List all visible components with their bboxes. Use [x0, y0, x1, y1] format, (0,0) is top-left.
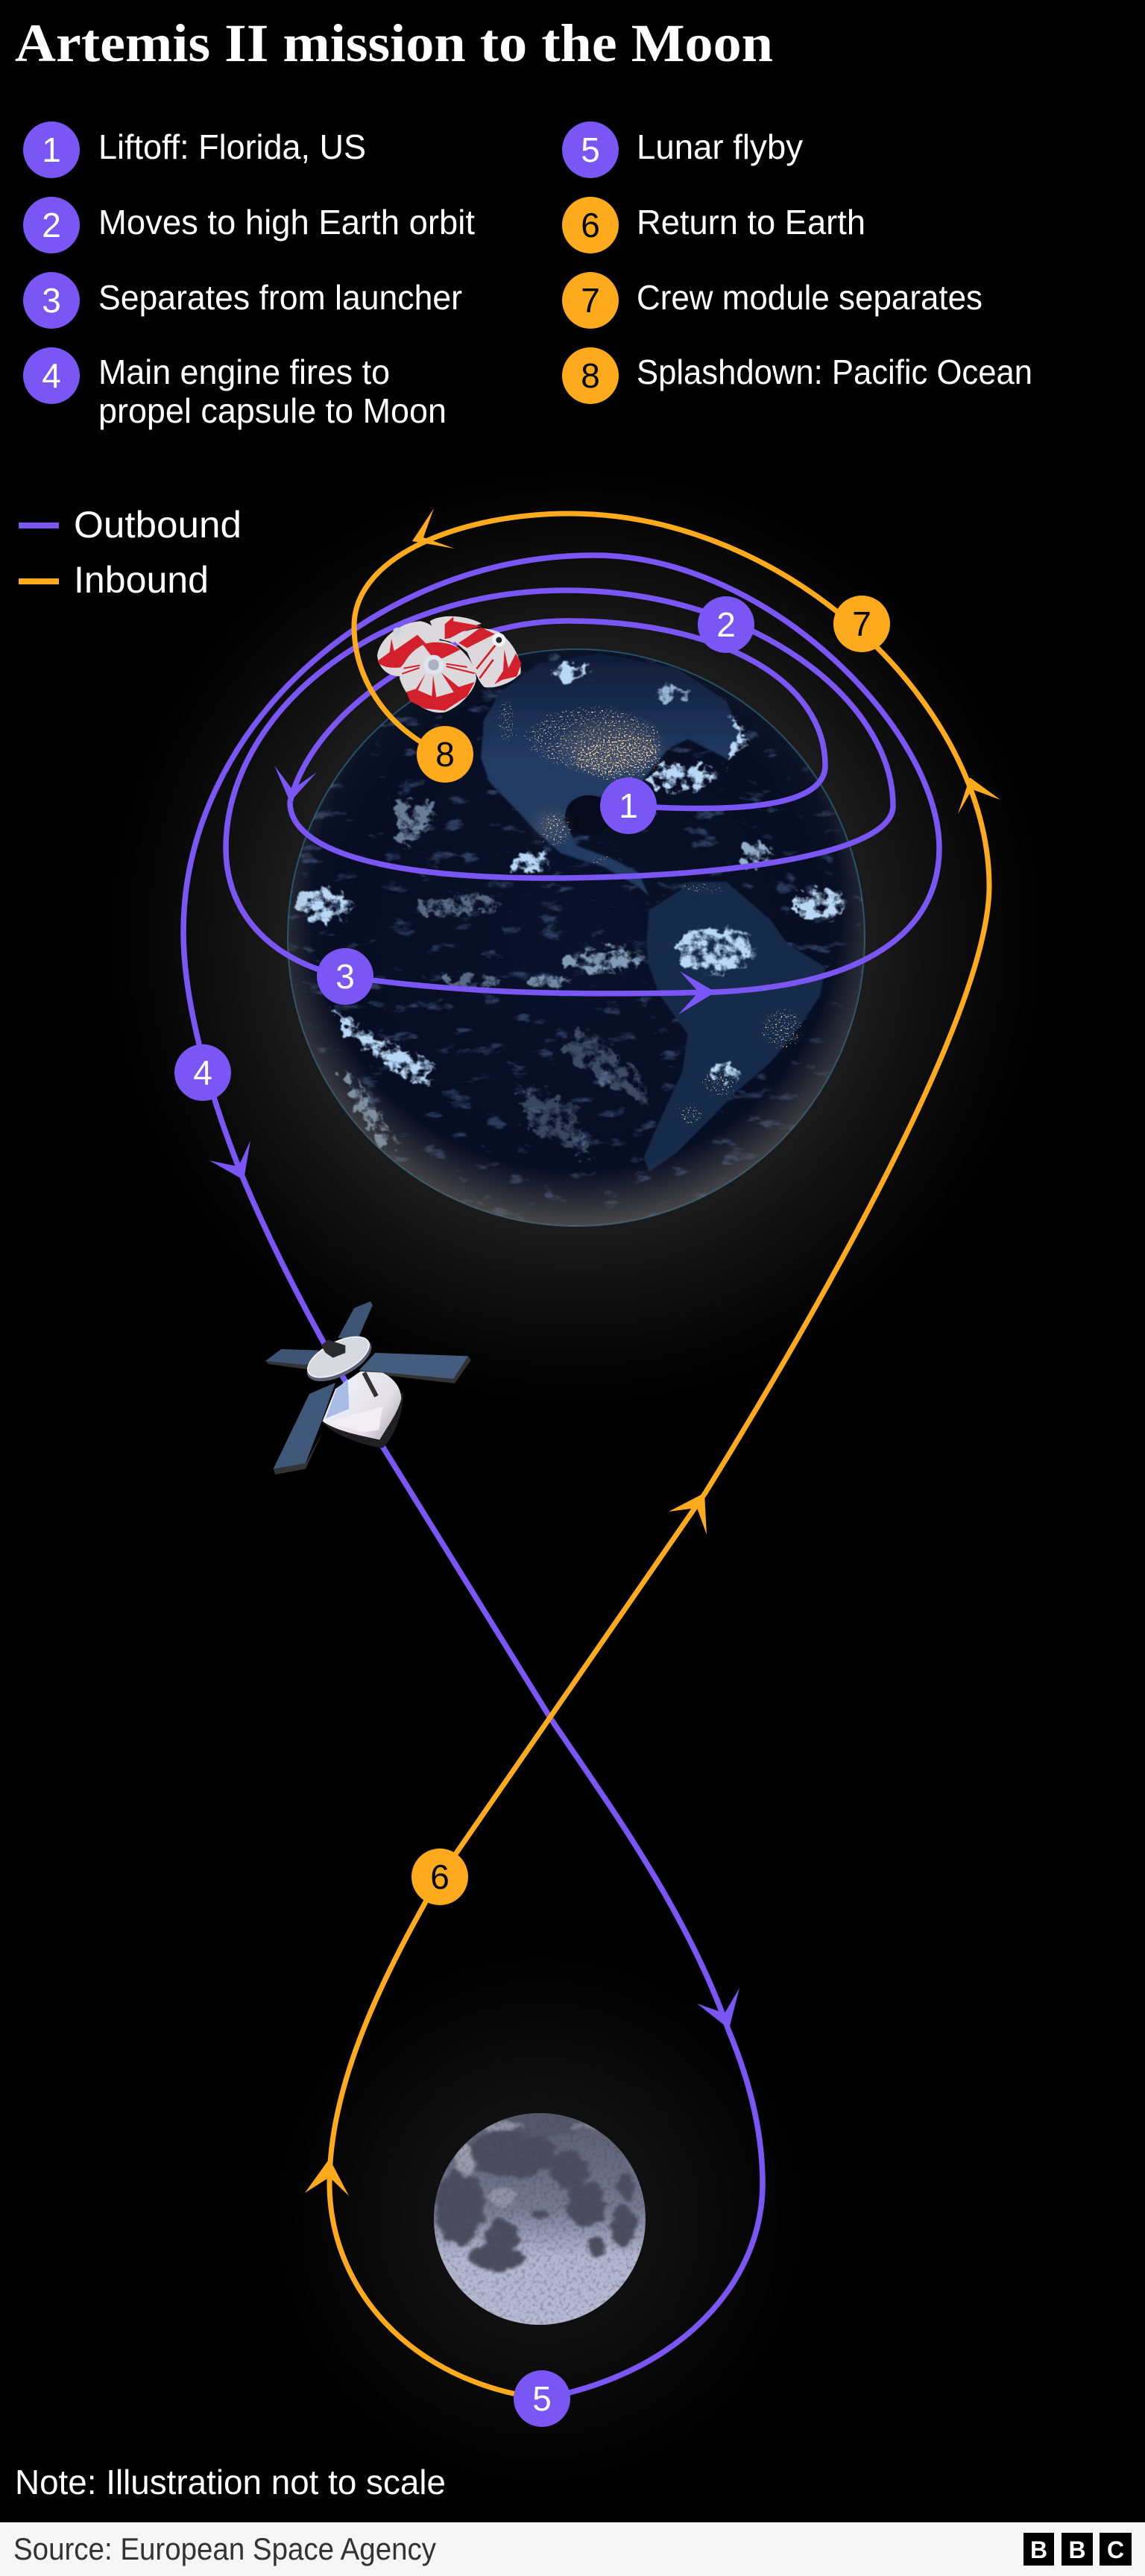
- marker 2: 2: [716, 605, 736, 644]
- BBC logo: B: [1068, 2536, 1086, 2563]
- marker 1: 1: [619, 786, 638, 825]
- north america: [481, 654, 743, 896]
- key item 3: Separates from launcher: [98, 278, 462, 317]
- footer: [0, 2522, 1145, 2576]
- outbound path: [183, 555, 939, 2399]
- key item 2: 2: [42, 206, 61, 244]
- arrow: outbound, leaving Earth: [209, 1140, 250, 1180]
- marker 8: 8: [435, 735, 455, 774]
- earth: [287, 648, 865, 1227]
- capsule body: [322, 1371, 403, 1448]
- parachute left: [377, 621, 440, 676]
- gulf of mexico: [565, 795, 612, 835]
- key item 8: 8: [581, 356, 600, 395]
- BBC logo: [1023, 2533, 1132, 2566]
- key item 1: 1: [42, 130, 61, 169]
- title: Artemis II mission to the Moon: [15, 13, 773, 73]
- cloud patches: [297, 663, 845, 1158]
- key item 1: [23, 121, 366, 178]
- key item 6: 6: [581, 206, 600, 244]
- key item 4: propel capsule to Moon: [98, 391, 447, 430]
- marker 5: 5: [532, 2379, 552, 2418]
- note: Note: Illustration not to scale: [15, 2463, 446, 2501]
- atmosphere limb: [288, 789, 865, 1226]
- key item 7: [562, 272, 982, 329]
- key item 7: Crew module separates: [637, 278, 982, 317]
- parachute back: [430, 616, 482, 643]
- south america: [643, 882, 826, 1172]
- key item 3: 3: [42, 281, 61, 320]
- marker 6: 6: [430, 1857, 450, 1896]
- key item 8: Splashdown: Pacific Ocean: [637, 353, 1032, 391]
- key item 7: 7: [581, 281, 600, 320]
- marker 3: 3: [335, 957, 355, 996]
- key item 4: [23, 347, 447, 430]
- marker 5: [514, 2370, 570, 2427]
- city lights: [491, 689, 809, 1131]
- marker 7: [833, 596, 890, 652]
- key item 8: [562, 347, 1032, 404]
- lunar maria: [435, 2114, 636, 2270]
- key item 6: Return to Earth: [637, 203, 865, 242]
- key item 5: [562, 121, 803, 178]
- marker 4: 4: [193, 1053, 212, 1092]
- key item 4: 4: [42, 356, 61, 395]
- parachute front: [400, 640, 476, 713]
- legend: outbound: Outbound: [74, 504, 242, 546]
- key item 2: Moves to high Earth orbit: [98, 203, 475, 242]
- key item 5: Lunar flyby: [637, 127, 803, 166]
- marker 8: [417, 726, 473, 783]
- key item 1: Liftoff: Florida, US: [98, 127, 366, 166]
- marker 1: [600, 777, 657, 834]
- key: numbered mission stages: [23, 121, 1032, 430]
- arrow: inbound, above Earth: [412, 508, 455, 549]
- key item 2: [23, 197, 475, 253]
- arrow: inbound, approaching Earth: [958, 777, 1000, 814]
- key item 3: [23, 272, 462, 329]
- marker 6: [411, 1849, 468, 1905]
- arrow: outbound, inner orbit: [274, 765, 317, 802]
- moon: [434, 2113, 646, 2325]
- key item 5: 5: [581, 130, 600, 169]
- marker 3: [317, 948, 373, 1005]
- BBC logo: C: [1107, 2536, 1124, 2563]
- key item 6: [562, 197, 865, 253]
- arrow: outbound, across Earth: [678, 971, 716, 1014]
- legend: [19, 504, 242, 601]
- marker 2: [698, 596, 754, 653]
- service module disc: [300, 1328, 378, 1390]
- arrow: inbound, near Moon: [305, 2159, 349, 2196]
- legend: inbound: Inbound: [74, 559, 209, 601]
- arrow: inbound, mid route: [669, 1493, 707, 1535]
- key item 4: Main engine fires to: [98, 353, 390, 391]
- marker 7: 7: [852, 604, 871, 643]
- inbound path: [329, 514, 989, 2399]
- marker 4: [174, 1044, 231, 1101]
- BBC logo: B: [1030, 2536, 1047, 2563]
- crater texture: [434, 2113, 646, 2325]
- arrow: outbound, towards Moon: [697, 1988, 739, 2029]
- solar panels: [265, 1301, 471, 1474]
- parachute right: [453, 628, 521, 687]
- source: Source: European Space Agency: [13, 2531, 436, 2566]
- moon glow: [264, 1943, 816, 2495]
- spacecraft: [265, 1301, 471, 1474]
- parachutes: [377, 616, 521, 713]
- earth glow: [99, 461, 1053, 1415]
